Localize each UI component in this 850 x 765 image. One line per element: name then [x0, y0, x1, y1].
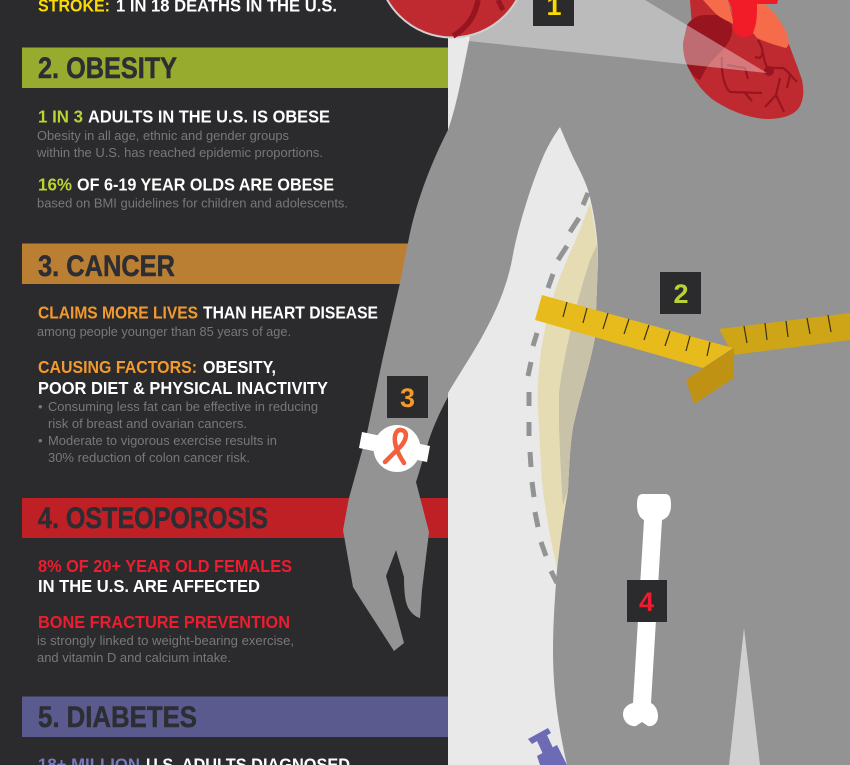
text: cancer facts: THAN HEART DISEASE: [203, 302, 378, 322]
number box 3: [387, 376, 428, 418]
number box 3: 3: [400, 383, 415, 413]
text: cancer facts: [37, 302, 378, 465]
icon: bone: [623, 494, 671, 726]
text: obesity facts: OF 6-19 YEAR OLDS ARE OBESE: [77, 174, 334, 194]
section band: osteoporosis: [22, 498, 448, 538]
heading: diabetes: 5. DIABETES: [38, 701, 197, 734]
inner leg gap: [729, 628, 760, 765]
magnified heart circle: [378, 0, 526, 38]
number box 2: [660, 272, 701, 314]
text: cancer facts: 30% reduction of colon cancer risk.: [48, 450, 250, 465]
text: cancer facts: OBESITY,: [203, 357, 276, 377]
text: cancer facts: CAUSING FACTORS:: [38, 357, 197, 377]
text: cancer facts: among people younger than 85 years of age.: [37, 324, 291, 339]
text: osteoporosis facts: and vitamin D and calcium intake.: [37, 650, 231, 665]
measuring tape: [535, 295, 850, 404]
number box 2: 2: [673, 279, 689, 309]
number box 4: [627, 580, 667, 622]
dashed outline of healthy body: [528, 193, 588, 583]
text: osteoporosis facts: BONE FRACTURE PREVENTION: [38, 612, 290, 632]
right light background: [448, 0, 850, 765]
text: diabetes fact: [38, 754, 350, 765]
text: cancer facts: CLAIMS MORE LIVES: [38, 302, 198, 322]
icon: syringe: [528, 728, 567, 765]
heading: obesity: 2. OBESITY: [38, 52, 177, 85]
text: cancer facts: risk of breast and ovarian cancers.: [48, 416, 247, 431]
fat layer shaded overlap: [559, 245, 598, 505]
text: cancer facts: •: [38, 433, 43, 448]
text: cancer facts: Moderate to vigorous exercise results in: [48, 433, 277, 448]
text: obesity facts: ADULTS IN THE U.S. IS OBESE: [88, 106, 330, 126]
section band: diabetes: [22, 696, 448, 737]
text: osteoporosis facts: [37, 556, 294, 665]
text: obesity facts: 16%: [38, 174, 72, 194]
text: obesity facts: Obesity in all age, ethnic and gender groups: [37, 128, 289, 143]
heading: osteoporosis: 4. OSTEOPOROSIS: [38, 502, 268, 535]
text: osteoporosis facts: 8% OF 20+ YEAR OLD FEMALES: [38, 556, 292, 576]
icon: wristband with ribbon: [359, 425, 430, 472]
number box 1: [533, 0, 574, 26]
text: cancer facts: POOR DIET & PHYSICAL INACTIVITY: [38, 378, 328, 398]
text: osteoporosis facts: is strongly linked to weight-bearing exercise,: [37, 633, 294, 648]
text: obesity facts: based on BMI guidelines for children and adolescents.: [37, 196, 348, 210]
text: obesity facts: 1 IN 3: [38, 106, 83, 126]
left dark panel: [0, 0, 448, 765]
icon: heart: [683, 0, 803, 119]
text: obesity facts: within the U.S. has reached epidemic proportions.: [36, 145, 323, 160]
number box 4: 4: [639, 587, 654, 617]
human body silhouette: [343, 0, 850, 765]
text: osteoporosis facts: IN THE U.S. ARE AFFECTED: [38, 576, 260, 596]
text: cancer facts: •: [38, 399, 43, 414]
body fat layer: [538, 203, 598, 567]
heading: cancer: 3. CANCER: [38, 250, 175, 283]
text: cancer facts: Consuming less fat can be effective in reducing: [48, 399, 318, 414]
section band: obesity: [22, 48, 448, 88]
magnifier light beam: [460, 0, 767, 73]
section band: cancer: [22, 244, 448, 284]
text: obesity facts: [36, 106, 348, 210]
